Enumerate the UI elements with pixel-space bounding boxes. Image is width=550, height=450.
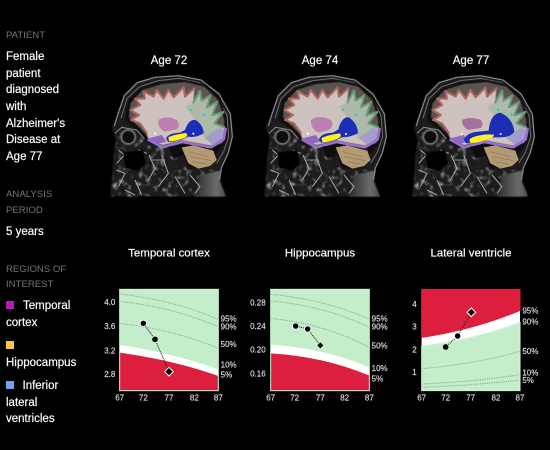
percentile labels — [372, 315, 388, 384]
x axis: 87 — [214, 393, 223, 402]
x axis: 67 — [115, 393, 125, 402]
percentile labels: 95% — [221, 315, 237, 324]
y axis: 2.8 — [104, 370, 116, 379]
trajectory — [442, 308, 476, 350]
legend: hippocampus — [6, 341, 77, 369]
percentile labels: 10% — [522, 369, 538, 378]
y axis: 4 — [412, 300, 417, 309]
text block: patient description: patient — [6, 68, 41, 80]
percentile labels: 95% — [522, 307, 538, 316]
brain scan: age 74 — [264, 75, 387, 197]
panel: hippocampus chart — [250, 248, 388, 402]
percentile labels: 5% — [372, 375, 383, 384]
y axis: 0.28 — [250, 298, 266, 307]
chart plot area — [422, 289, 520, 391]
y axis: 0.20 — [250, 346, 266, 355]
y axis: 3 — [412, 323, 417, 332]
brain scan: age 72 — [110, 75, 233, 197]
x axis: 67 — [266, 393, 276, 402]
chart title: Lateral ventricle — [430, 248, 512, 260]
heading: age 74: Age 74 — [302, 55, 339, 67]
y axis: 0.24 — [250, 322, 266, 331]
x axis: 77 — [466, 393, 476, 402]
legend: temporal cortex — [6, 300, 70, 329]
trajectory — [140, 320, 173, 376]
legend: temporal cortex: Temporal — [23, 300, 70, 312]
percentile labels: 90% — [221, 322, 237, 331]
y axis: 1 — [412, 368, 417, 377]
x axis — [266, 393, 374, 402]
x axis — [417, 393, 525, 402]
y axis — [250, 298, 266, 379]
legend: inferior lateral ventricles: ventricles — [6, 413, 55, 425]
y axis — [104, 298, 116, 379]
x axis: 67 — [417, 393, 427, 402]
panel: temporal cortex chart — [104, 248, 237, 402]
x axis: 82 — [190, 393, 199, 402]
x axis: 77 — [316, 393, 325, 402]
heading: regions of interest — [6, 264, 66, 290]
percentile labels: 90% — [372, 322, 388, 331]
x axis — [115, 393, 223, 402]
heading: regions of interest: INTEREST — [6, 279, 54, 290]
percentile labels: 10% — [372, 364, 388, 373]
chart title: Hippocampus — [285, 248, 355, 260]
y axis: 3.6 — [104, 322, 116, 331]
x axis: 87 — [365, 393, 374, 402]
panel: patient sidebar — [5, 30, 77, 425]
heading: age 72: Age 72 — [151, 55, 187, 67]
percentile labels: 5% — [221, 371, 232, 380]
legend: inferior lateral ventricles — [6, 380, 58, 425]
x axis: 87 — [516, 393, 525, 402]
percentile labels: 95% — [372, 315, 388, 324]
x axis: 77 — [165, 393, 174, 402]
percentile labels — [522, 307, 538, 385]
x axis: 82 — [492, 393, 501, 402]
text block: patient description: diagnosed — [6, 84, 59, 96]
percentile labels — [221, 315, 237, 380]
legend: inferior lateral ventricles: Inferior — [22, 380, 58, 392]
legend: inferior lateral ventricles: lateral — [6, 397, 37, 409]
x axis: 72 — [290, 393, 300, 402]
percentile labels: 50% — [221, 340, 237, 349]
percentile labels: 5% — [522, 376, 534, 385]
heading: analysis period: PERIOD — [6, 205, 43, 216]
chart title: Temporal cortex — [128, 248, 210, 260]
x axis: 72 — [139, 393, 148, 402]
heading: analysis period: ANALYSIS — [6, 189, 52, 200]
percentile labels: 10% — [221, 360, 237, 369]
x axis: 72 — [441, 393, 451, 402]
heading: regions of interest: REGIONS OF — [6, 264, 66, 275]
y axis: 3.2 — [104, 346, 116, 355]
y axis: 0.16 — [250, 370, 266, 379]
chart plot area — [120, 289, 218, 391]
text block: patient description: Female — [6, 51, 44, 63]
text block: patient description: Age 77 — [6, 151, 42, 163]
chart plot area — [271, 289, 369, 391]
text block: patient description — [5, 51, 65, 163]
y axis: 2 — [412, 345, 417, 354]
y axis: 4.0 — [104, 298, 116, 307]
heading: age 77: Age 77 — [453, 55, 489, 67]
panel: lateral ventricle chart — [412, 248, 538, 402]
legend: temporal cortex: cortex — [6, 317, 38, 329]
percentile labels: 50% — [372, 341, 388, 350]
legend: hippocampus: Hippocampus — [6, 357, 77, 369]
heading: patient: PATIENT — [6, 30, 45, 41]
percentile labels: 90% — [522, 318, 538, 327]
brain scan: age 77 — [412, 75, 535, 197]
text block: patient description: with — [5, 101, 26, 113]
y axis — [412, 300, 417, 377]
heading: analysis period — [6, 189, 52, 216]
trajectory — [292, 323, 324, 349]
text block: patient description: Alzheimer's — [6, 118, 65, 130]
percentile labels: 50% — [522, 347, 538, 356]
x axis: 82 — [340, 393, 350, 402]
text block: analysis period value: 5 years — [6, 226, 44, 238]
text block: patient description: Disease at — [6, 134, 61, 146]
